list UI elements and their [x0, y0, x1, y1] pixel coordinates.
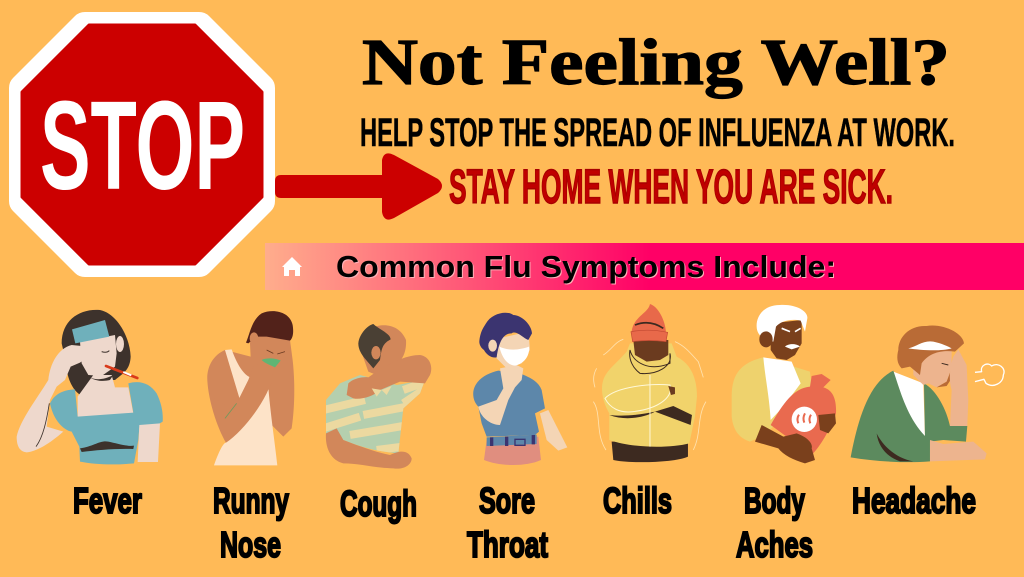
- label: Runny: [213, 480, 289, 521]
- symptom: runny nose: [207, 311, 294, 565]
- title: Not Feeling Well?: [362, 26, 950, 99]
- label line two: Nose: [220, 524, 281, 565]
- illustration: woman with thermometer: [17, 310, 163, 464]
- label: Cough: [340, 483, 417, 524]
- symptom: headache: [851, 326, 1004, 521]
- label: Chills: [603, 480, 672, 521]
- stop sign: [9, 12, 275, 277]
- label: Body: [744, 480, 805, 521]
- illustration: man blowing nose: [207, 311, 294, 465]
- arrow: [275, 153, 442, 220]
- label: Fever: [73, 480, 142, 521]
- illustration: man with hot water bottle: [732, 305, 836, 463]
- label line two: Throat: [467, 524, 548, 565]
- symptom: chills: [593, 304, 706, 521]
- symptom: cough: [323, 324, 431, 524]
- label: Headache: [852, 480, 976, 521]
- illustration: shivering person in coat: [593, 304, 706, 462]
- symptom: body aches: [732, 305, 836, 565]
- label: Sore: [479, 480, 535, 521]
- banner: common flu symptoms: [265, 243, 1024, 290]
- banner heading shadow: Common Flu Symptoms Include:: [337, 250, 837, 285]
- icon: home: [282, 257, 302, 276]
- banner heading: Common Flu Symptoms Include:: [336, 249, 836, 284]
- label line two: Aches: [736, 524, 813, 565]
- symptom: sore throat: [467, 313, 567, 565]
- stop sign: STOP: [40, 75, 245, 216]
- illustration: woman holding head: [851, 326, 1004, 462]
- illustration: man coughing into elbow: [323, 324, 431, 469]
- symptom: fever: [17, 310, 163, 521]
- illustration: person in mask holding throat: [473, 313, 567, 465]
